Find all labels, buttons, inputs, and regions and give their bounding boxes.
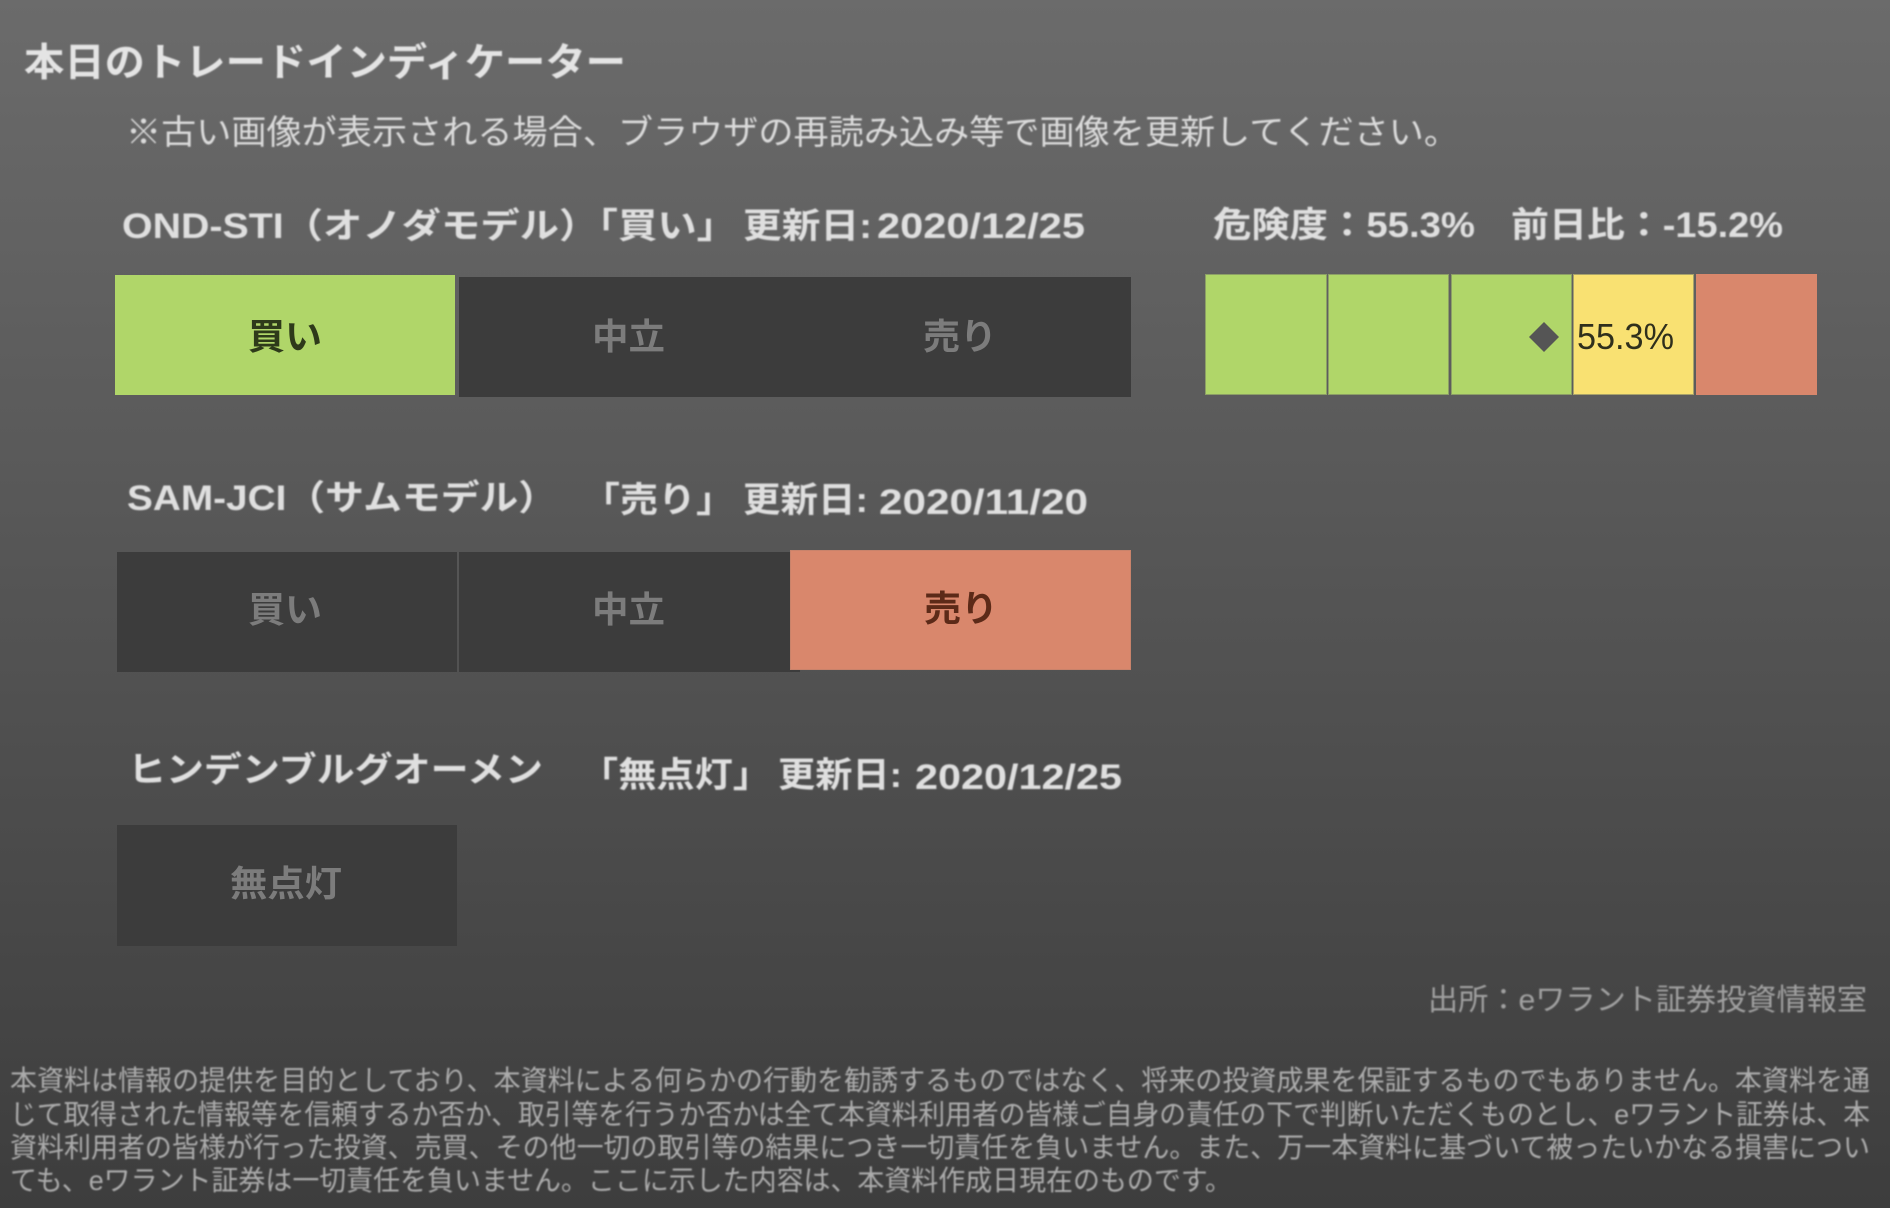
- risk gauge: [1206, 274, 1817, 395]
- unlit label: 無点灯: [230, 863, 342, 904]
- sell cell active: [790, 550, 1130, 670]
- buy label: 買い: [248, 589, 322, 630]
- heading: SAM-JCI model: [127, 478, 1088, 522]
- neutral and sell cells: [459, 277, 1131, 397]
- heading: Hindenburg Omen: 「無点灯」: [580, 756, 771, 795]
- disclaimer: 本資料は情報の提供を目的としており、本資料による何らかの行動を勧誘するものではなく、将来の投資成果を保証するものでもありません。本資料を通: [10, 1065, 1870, 1096]
- sell label: 売り: [923, 316, 997, 357]
- signal bar: SAM-JCI: [117, 550, 1130, 672]
- heading: SAM-JCI model: 「売り」: [582, 481, 734, 520]
- signal bar: OND-STI: [115, 275, 1131, 397]
- heading: risk level: [1213, 206, 1783, 245]
- heading: Hindenburg Omen: ヒンデンブルグオーメン: [128, 750, 543, 790]
- signal bar: Hindenburg Omen: [117, 825, 457, 946]
- heading: Hindenburg Omen: 2020/12/25: [915, 758, 1122, 797]
- buy cell: [117, 552, 457, 672]
- heading: risk level: 前日比：-15.2%: [1511, 206, 1783, 245]
- disclaimer: [10, 1065, 1870, 1196]
- heading: OND-STI model: 更新日:: [743, 207, 872, 246]
- neutral label: 中立: [592, 589, 665, 630]
- sell label: 売り: [924, 588, 998, 629]
- diamond marker: [1529, 322, 1559, 352]
- unlit cell: [117, 825, 457, 946]
- heading: SAM-JCI model: 更新日:: [743, 481, 868, 520]
- gauge cell 3: [1452, 274, 1572, 394]
- note: reload instruction: ※古い画像が表示される場合、ブラウザの再読み込み等で画像を更新してください。: [126, 114, 1459, 152]
- disclaimer: 資料利用者の皆様が行った投資、売買、その他一切の取引等の結果につき一切責任を負いません。また、万一本資料に基づいて被ったいかなる損害につい: [10, 1132, 1870, 1163]
- buy cell active: [115, 275, 455, 395]
- buy label: 買い: [248, 316, 322, 357]
- heading: Hindenburg Omen: 更新日:: [778, 756, 902, 795]
- gauge cell 5: [1696, 274, 1817, 395]
- gauge cell 2: [1328, 274, 1448, 394]
- gauge value: 55.3%: [1577, 316, 1674, 357]
- heading: SAM-JCI model: SAM-JCI（サムモデル）: [127, 478, 557, 518]
- gauge cell 1: [1206, 274, 1326, 394]
- title: 本日のトレードインディケーター: [24, 41, 626, 85]
- heading: OND-STI model: [122, 206, 1085, 246]
- heading: OND-STI model: OND-STI（オノダモデル）「買い」: [122, 206, 736, 246]
- disclaimer: ても、eワラント証券は一切責任を負いません。ここに示した内容は、本資料作成日現在のものです。: [10, 1165, 1232, 1196]
- heading: risk level: 危険度：55.3%: [1213, 206, 1475, 245]
- heading: OND-STI model: 2020/12/25: [877, 207, 1085, 246]
- gauge cell 4: [1574, 274, 1694, 394]
- heading: Hindenburg Omen: [128, 750, 1122, 797]
- neutral cell: [459, 552, 800, 672]
- heading: SAM-JCI model: 2020/11/20: [879, 483, 1088, 522]
- footer text layer: [10, 984, 1870, 1196]
- text layer: [24, 41, 1783, 797]
- source: 出所：eワラント証券投資情報室: [1428, 984, 1867, 1017]
- neutral label: 中立: [592, 316, 665, 357]
